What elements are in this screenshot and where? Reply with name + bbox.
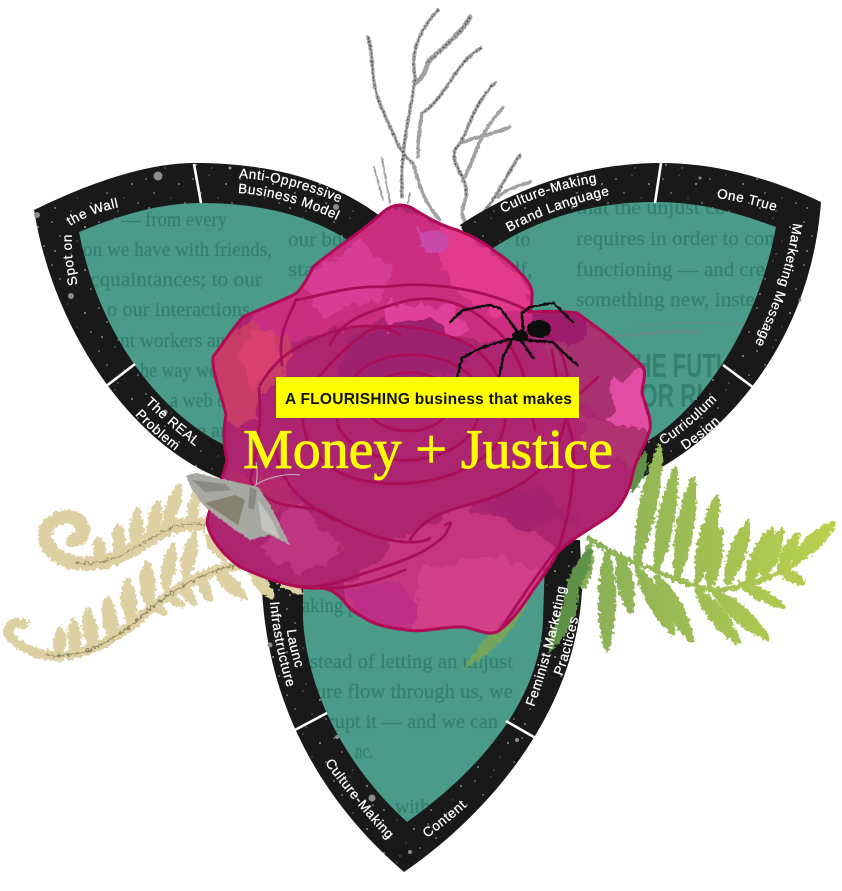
band labels: Culture-Making [500, 175, 596, 212]
bottom lobe teal field with background text: stead of letting an unjust [310, 651, 513, 673]
band labels: Infrastructure [270, 602, 294, 686]
band labels: Practices [554, 617, 578, 676]
panel: roots above the diagram [368, 10, 530, 226]
icon: spider [450, 303, 577, 383]
band labels: Curriculum [660, 396, 717, 444]
left lobe teal field with background text [79, 203, 346, 444]
band labels: One True [718, 189, 776, 210]
panel: bottom lobe [262, 540, 582, 872]
band labels: Culture-Making [326, 760, 393, 840]
right lobe teal field with background text: requires in order to con [576, 228, 775, 250]
band labels: Content [423, 800, 467, 836]
right lobe teal field with background text: that the unjust co [576, 197, 726, 219]
panel: right lobe [460, 163, 821, 485]
band labels: Brand Language [505, 188, 609, 232]
rose outline [207, 205, 650, 633]
bottom lobe teal field with background text: rupt it — and we can [328, 711, 498, 733]
right lobe teal field with background text [493, 202, 776, 441]
right lobe teal field with background text: lf, [515, 259, 532, 281]
panel: left lobe [34, 163, 385, 480]
icon: moth [186, 462, 300, 545]
left lobe teal field with background text: sta [288, 259, 314, 281]
band labels [64, 168, 802, 840]
band labels: The REAL [147, 396, 198, 446]
right lobe teal field with background text: to [515, 229, 531, 251]
band labels: Problem [136, 409, 178, 450]
left lobe teal field with background text: a web of [170, 390, 232, 412]
icon: beige fern upper frond [45, 485, 205, 564]
left lobe teal field with background text: o our interactions [107, 299, 250, 321]
band labels: Marketing Message [756, 224, 802, 346]
bottom lobe teal field with background text: with [395, 796, 430, 818]
bottom lobe teal field with background text [303, 576, 544, 822]
band dividers [105, 163, 754, 740]
bottom lobe teal field with background text: nc. [355, 741, 373, 763]
left lobe teal field with background text: our boo [288, 229, 353, 251]
left lobe teal field with background text: e an [197, 420, 230, 442]
band labels: the Wall [66, 198, 118, 226]
band labels: Anti-Oppressive [238, 168, 341, 202]
band labels: Feminist Marketing [526, 586, 568, 706]
band labels: Design [680, 418, 720, 450]
right lobe teal field with background text: something new, inste [576, 289, 755, 311]
rose inner line drawing [240, 285, 598, 630]
left lobe teal field with background text: on we have with friends, [83, 239, 272, 261]
panel: rose [200, 195, 660, 640]
bottom lobe teal field with background text: aking p [302, 595, 357, 617]
band labels: Business Model [238, 184, 340, 220]
heading label: yellow strip [276, 377, 579, 418]
bottom lobe teal field with background text: ture flow through us, we [310, 681, 513, 703]
left lobe teal field with background text: he way we [140, 360, 217, 382]
icon: green fern [463, 447, 833, 670]
heading label: yellow strip: A FLOURISHING business that makes [285, 391, 572, 408]
bottom lobe black band [262, 540, 582, 872]
right lobe teal field with background text: functioning — and cre [576, 259, 765, 281]
title: Money + Justice [243, 419, 613, 481]
left lobe teal field with background text: nt workers and [120, 330, 235, 352]
right lobe teal field with background text: THE FUTU [622, 347, 732, 384]
band labels: Spot on [64, 235, 78, 286]
band labels: Launc [286, 630, 302, 668]
left lobe teal field with background text: — from every [121, 209, 227, 231]
left lobe black band [34, 163, 385, 480]
rose petal colour patches [200, 195, 660, 640]
right lobe teal field with background text: OR RIS [640, 377, 718, 414]
right lobe black band [460, 163, 821, 485]
band speckles [34, 166, 802, 854]
icon: beige fern lower frond [8, 533, 300, 656]
left lobe teal field with background text: cquaintances; to our [90, 269, 262, 291]
